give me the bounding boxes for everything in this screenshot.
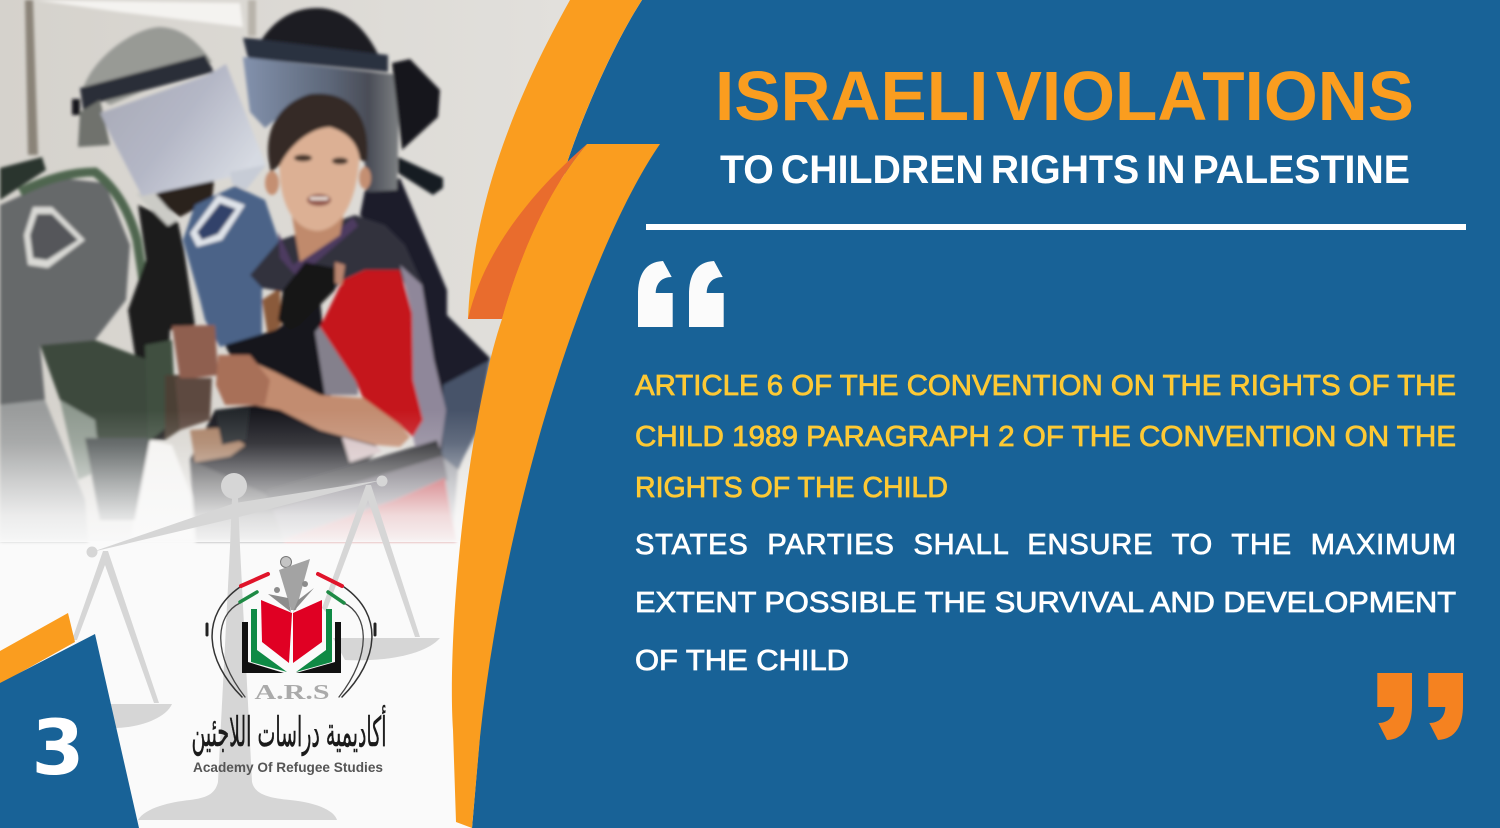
number badge [0,613,139,828]
right officer sleeve [183,186,282,347]
article citation text: RIGHTS OF THE CHILD [635,472,948,504]
boy glove [278,262,335,330]
panel: blue content background [472,0,1500,828]
photo: riot police holding a boy [0,0,570,542]
boy vest [250,215,423,305]
logo initials: A.R.S [254,680,330,704]
belt and lower clothes [267,440,443,510]
boy lilac strip [400,265,446,470]
boy torso [190,300,380,500]
logo English name: Academy Of Refugee Studies [193,759,383,775]
logo figures [268,556,314,612]
right helmet [260,8,378,54]
icon: closing quotation mark [1377,673,1463,740]
boy arm [248,360,410,447]
wedge: dark orange [468,144,587,319]
badge orange back [0,613,75,684]
badge blue front [0,634,139,828]
logo: Academy of Refugee Studies [192,556,386,775]
boy red sleeve [320,270,423,437]
logo rings [207,574,375,697]
text: أكاديمية دراسات اللاجئين [192,705,386,756]
boy grey panel [315,320,358,395]
face of left officer [150,172,215,217]
article body text: STATES PARTIES SHALL ENSURE TO THE MAXIMUM [635,529,1456,561]
article body text: EXTENT POSSIBLE THE SURVIVAL AND DEVELOPMENT [635,587,1456,619]
icon: opening quotation mark [638,261,724,327]
logo book [242,600,341,673]
orange arc: lower [452,144,660,828]
hands [172,325,218,380]
title: ISRAELI VIOLATIONS [715,57,1414,135]
orange arc: upper [468,0,642,319]
left helmet [83,27,212,105]
right officer back and shoulder [360,178,490,470]
police shoulder patch [24,207,85,268]
article citation text: CHILD 1989 PARAGRAPH 2 OF THE CONVENTION ON THE [635,421,1456,453]
divider [646,224,1466,230]
article citation text [635,370,1456,504]
left officer body [0,178,130,405]
article citation text: ARTICLE 6 OF THE CONVENTION ON THE RIGHTS OF THE [635,370,1456,402]
boy neck and head [290,205,345,262]
article body text: OF THE CHILD [635,645,849,677]
subtitle: TO CHILDREN RIGHTS IN PALESTINE [720,148,1410,192]
scale of justice watermark [72,473,440,820]
badge number: 3 [32,703,84,792]
article body text [635,529,1456,677]
left visor [100,64,266,196]
